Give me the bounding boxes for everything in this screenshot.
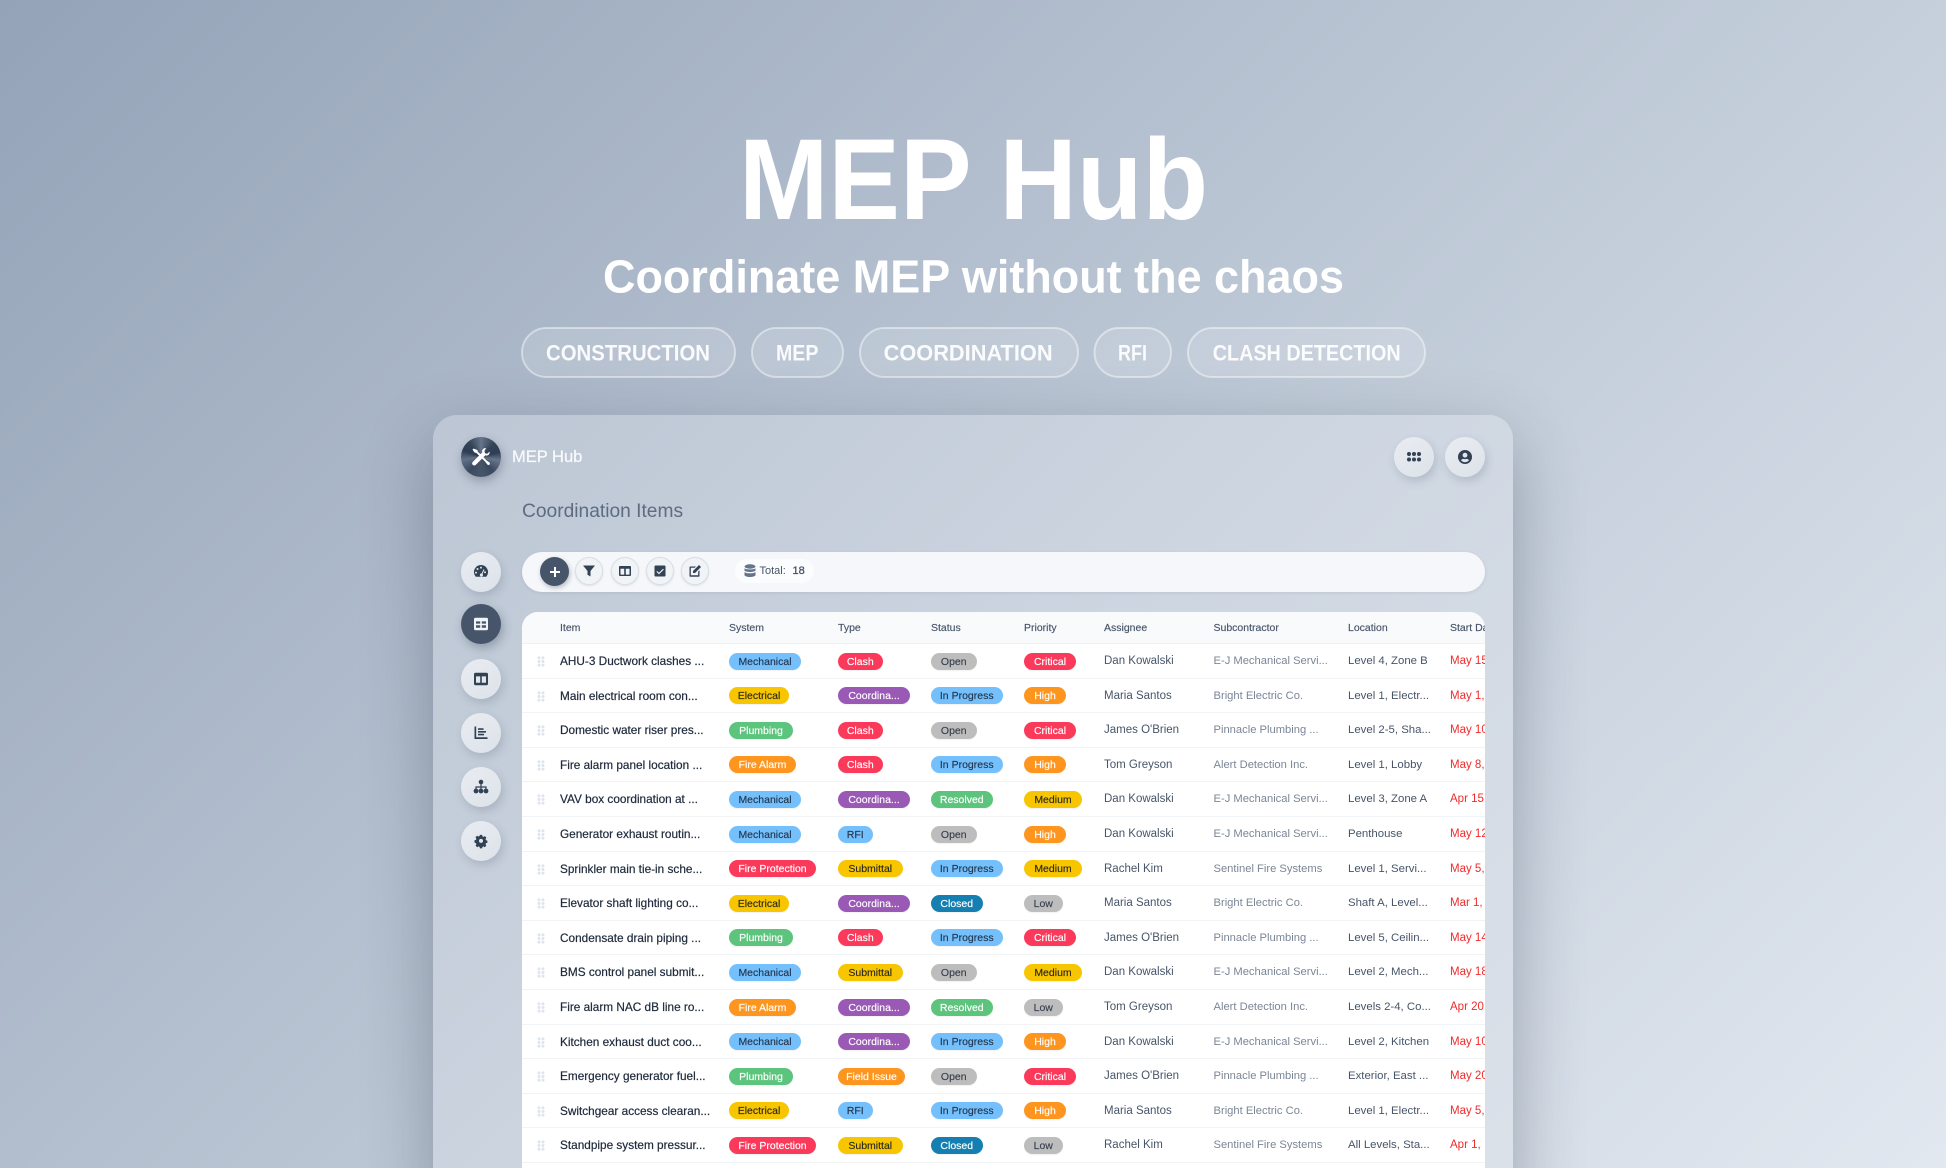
panel: app window <box>433 415 1513 1168</box>
row 8: Closed <box>940 898 973 910</box>
row 13: James O'Brien <box>1104 1070 1179 1082</box>
row 1: E-J Mechanical Servi... <box>1214 655 1328 667</box>
row 13: Critical <box>1034 1071 1066 1083</box>
row 15 <box>522 1128 1484 1163</box>
sidebar nav: dashboard <box>461 552 501 592</box>
row 2: Coordina... <box>848 690 900 702</box>
sidebar nav: hierarchy <box>461 767 501 807</box>
row 5: Resolved <box>940 794 984 806</box>
row 13: Pinnacle Plumbing ... <box>1214 1070 1319 1082</box>
row 1: Mechanical <box>738 656 792 668</box>
row 10: Mechanical <box>738 967 792 979</box>
row 15: Low <box>1034 1140 1053 1152</box>
row 7: Fire Protection <box>738 863 807 875</box>
page heading: Coordination Items <box>522 501 683 522</box>
table header: Type <box>838 622 861 634</box>
row 4: High <box>1034 759 1056 771</box>
row 2: Main electrical room con... <box>560 689 698 703</box>
row 7: Rachel Kim <box>1104 863 1163 875</box>
row 7 <box>522 852 1484 886</box>
icon button: apps grid <box>1394 437 1434 477</box>
row 11: Coordina... <box>848 1002 900 1014</box>
row 5: E-J Mechanical Servi... <box>1214 793 1328 805</box>
row 10: Submittal <box>848 967 892 979</box>
tag: clash detection: CLASH DETECTION <box>1213 340 1401 366</box>
row 11: Resolved <box>940 1002 984 1014</box>
row 9: Critical <box>1034 932 1066 944</box>
table <box>522 612 1484 1168</box>
row 4 <box>522 748 1484 782</box>
toolbar <box>522 552 1484 592</box>
row 6 <box>522 817 1484 852</box>
row 3: Pinnacle Plumbing ... <box>1214 724 1319 736</box>
row 7: Submittal <box>848 863 892 875</box>
row 5 <box>522 782 1484 817</box>
hero header <box>521 116 1426 378</box>
row 9: Condensate drain piping ... <box>560 931 701 945</box>
row 15: Apr 1, <box>1450 1139 1481 1151</box>
row 15: Sentinel Fire Systems <box>1214 1139 1322 1151</box>
row 2: Bright Electric Co. <box>1214 690 1303 702</box>
row 11: Fire Alarm <box>739 1002 786 1014</box>
total count: 18 <box>792 565 805 577</box>
row 6: Mechanical <box>738 828 792 840</box>
row 8: Coordina... <box>848 898 900 910</box>
row 4: Fire alarm panel location ... <box>560 758 702 772</box>
row 7: Sentinel Fire Systems <box>1214 863 1322 875</box>
button: columns <box>611 557 639 585</box>
row 2: May 1, <box>1450 690 1484 702</box>
row 10 <box>522 955 1484 990</box>
row 10: E-J Mechanical Servi... <box>1214 966 1328 978</box>
button: check <box>646 557 674 585</box>
table header <box>522 612 1484 644</box>
row 6: RFI <box>847 828 864 840</box>
button: edit <box>681 557 709 585</box>
table header: Status <box>931 622 961 634</box>
row 2: In Progress <box>940 690 994 702</box>
tag: construction: CONSTRUCTION <box>546 340 710 366</box>
row 11: Tom Greyson <box>1104 1001 1172 1013</box>
row 8: Shaft A, Level... <box>1348 897 1428 909</box>
subtitle: Coordinate MEP without the chaos <box>603 250 1344 302</box>
row 15: Closed <box>940 1140 973 1152</box>
row 1: Critical <box>1034 656 1066 668</box>
icon: logo tools <box>461 437 501 477</box>
row 2: High <box>1034 690 1056 702</box>
row 11: Levels 2-4, Co... <box>1348 1001 1431 1013</box>
row 3: Critical <box>1034 725 1066 737</box>
tag: clash detection <box>1188 328 1425 377</box>
sidebar nav: board <box>461 659 501 699</box>
row 14: Electrical <box>738 1105 780 1117</box>
row 1 <box>522 644 1484 679</box>
row 8: Electrical <box>738 898 780 910</box>
row 4: Clash <box>847 759 874 771</box>
row 3 <box>522 713 1484 748</box>
row 5: Coordina... <box>848 794 900 806</box>
row 15: Fire Protection <box>738 1140 807 1152</box>
row 5: VAV box coordination at ... <box>560 792 698 806</box>
row 9 <box>522 921 1484 955</box>
row 4: Alert Detection Inc. <box>1214 759 1308 771</box>
row 5: Medium <box>1034 794 1072 806</box>
row 1: Clash <box>847 656 874 668</box>
table header: Assignee <box>1104 622 1147 634</box>
row 3: Domestic water riser pres... <box>560 723 704 737</box>
row 10: Medium <box>1034 967 1072 979</box>
row 2: Level 1, Electr... <box>1348 690 1429 702</box>
row 4: Fire Alarm <box>739 759 786 771</box>
row 13: Emergency generator fuel... <box>560 1069 706 1083</box>
row 7: Sprinkler main tie-in sche... <box>560 862 702 876</box>
row 11: Fire alarm NAC dB line ro... <box>560 1000 704 1014</box>
row 13 <box>522 1059 1484 1094</box>
row 6: Dan Kowalski <box>1104 828 1174 840</box>
row 8 <box>522 886 1484 921</box>
row 1: Level 4, Zone B <box>1348 655 1428 667</box>
row 12: Mechanical <box>738 1036 792 1048</box>
row 3: James O'Brien <box>1104 724 1179 736</box>
row 5: Mechanical <box>738 794 792 806</box>
row 12: In Progress <box>940 1036 994 1048</box>
row 9: Pinnacle Plumbing ... <box>1214 932 1319 944</box>
row 11: Alert Detection Inc. <box>1214 1001 1308 1013</box>
row 6: Penthouse <box>1348 828 1402 840</box>
row 12: Coordina... <box>848 1036 900 1048</box>
row 14: Level 1, Electr... <box>1348 1105 1429 1117</box>
row 7: Level 1, Servi... <box>1348 863 1427 875</box>
sidebar nav: settings <box>461 821 501 861</box>
row 13: Plumbing <box>739 1071 783 1083</box>
row 6: High <box>1034 828 1056 840</box>
sidebar nav: chart <box>461 713 501 753</box>
row 9: Clash <box>847 932 874 944</box>
title: MEP Hub <box>739 116 1208 244</box>
row 3: Level 2-5, Sha... <box>1348 724 1431 736</box>
total count <box>735 559 814 583</box>
row 8: Mar 1, <box>1450 897 1483 909</box>
row 15: Standpipe system pressur... <box>560 1138 706 1152</box>
sidebar nav: table active <box>461 604 501 644</box>
row 15: Submittal <box>848 1140 892 1152</box>
row 7: In Progress <box>940 863 994 875</box>
row 9: Level 5, Ceilin... <box>1348 932 1429 944</box>
row 2: Electrical <box>738 690 780 702</box>
row 4: Tom Greyson <box>1104 759 1172 771</box>
row 8: Bright Electric Co. <box>1214 897 1303 909</box>
tag: construction <box>522 328 735 377</box>
row 14: In Progress <box>940 1105 994 1117</box>
row 14: RFI <box>847 1105 864 1117</box>
row 10: Dan Kowalski <box>1104 966 1174 978</box>
tag: mep <box>752 328 843 377</box>
row 4: Level 1, Lobby <box>1348 759 1422 771</box>
row 2 <box>522 679 1484 713</box>
row 4: In Progress <box>940 759 994 771</box>
row 9: James O'Brien <box>1104 932 1179 944</box>
row 14: Maria Santos <box>1104 1105 1172 1117</box>
row 12: E-J Mechanical Servi... <box>1214 1036 1328 1048</box>
table header: System <box>729 622 764 634</box>
row 9: Plumbing <box>739 932 783 944</box>
tag: coordination: COORDINATION <box>884 340 1053 366</box>
row 13: Open <box>941 1071 967 1083</box>
row 12: Level 2, Kitchen <box>1348 1036 1429 1048</box>
row 14: May 5, <box>1450 1105 1484 1117</box>
row 8: Maria Santos <box>1104 897 1172 909</box>
row 15: All Levels, Sta... <box>1348 1139 1430 1151</box>
row 14 <box>522 1094 1484 1128</box>
row 8: Low <box>1034 898 1053 910</box>
row 12 <box>522 1025 1484 1059</box>
row 1: Dan Kowalski <box>1104 655 1174 667</box>
row 10: Level 2, Mech... <box>1348 966 1428 978</box>
row 6: E-J Mechanical Servi... <box>1214 828 1328 840</box>
row 11: Low <box>1034 1002 1053 1014</box>
row 1: Open <box>941 656 967 668</box>
total count: Total: <box>760 565 786 577</box>
row 7: May 5, <box>1450 863 1484 875</box>
row 11 <box>522 990 1484 1025</box>
row 7: Medium <box>1034 863 1072 875</box>
table header: Subcontractor <box>1214 622 1279 634</box>
row 3: Plumbing <box>739 725 783 737</box>
row 2: Maria Santos <box>1104 690 1172 702</box>
row 4: May 8, <box>1450 759 1484 771</box>
row 13: Exterior, East ... <box>1348 1070 1428 1082</box>
row 5: Level 3, Zone A <box>1348 793 1427 805</box>
row 14: Bright Electric Co. <box>1214 1105 1303 1117</box>
row 3: Open <box>941 725 967 737</box>
row 12: High <box>1034 1036 1056 1048</box>
row 10: BMS control panel submit... <box>560 965 704 979</box>
row 9: In Progress <box>940 932 994 944</box>
table header: Location <box>1348 622 1388 634</box>
button: filter <box>575 557 603 585</box>
row 6: Generator exhaust routin... <box>560 827 700 841</box>
row 3: Clash <box>847 725 874 737</box>
row 15: Rachel Kim <box>1104 1139 1163 1151</box>
tag: coordination <box>860 328 1078 377</box>
row 10: Open <box>941 967 967 979</box>
brand name: MEP Hub <box>512 448 582 466</box>
button: add <box>540 557 569 586</box>
tag: mep: MEP <box>776 340 818 366</box>
table header: Item <box>560 622 580 634</box>
row 12: Kitchen exhaust duct coo... <box>560 1035 702 1049</box>
row 13: Field Issue <box>846 1071 897 1083</box>
row 12: Dan Kowalski <box>1104 1036 1174 1048</box>
row 5: Dan Kowalski <box>1104 793 1174 805</box>
icon button: user account <box>1444 437 1484 477</box>
row 1: AHU-3 Ductwork clashes ... <box>560 654 704 668</box>
tag: rfi: RFI <box>1118 340 1147 366</box>
row 14: Switchgear access clearan... <box>560 1104 710 1118</box>
row 14: High <box>1034 1105 1056 1117</box>
tag: rfi <box>1094 328 1171 377</box>
row 8: Elevator shaft lighting co... <box>560 896 698 910</box>
row 6: Open <box>941 828 967 840</box>
table header: Priority <box>1024 622 1057 634</box>
